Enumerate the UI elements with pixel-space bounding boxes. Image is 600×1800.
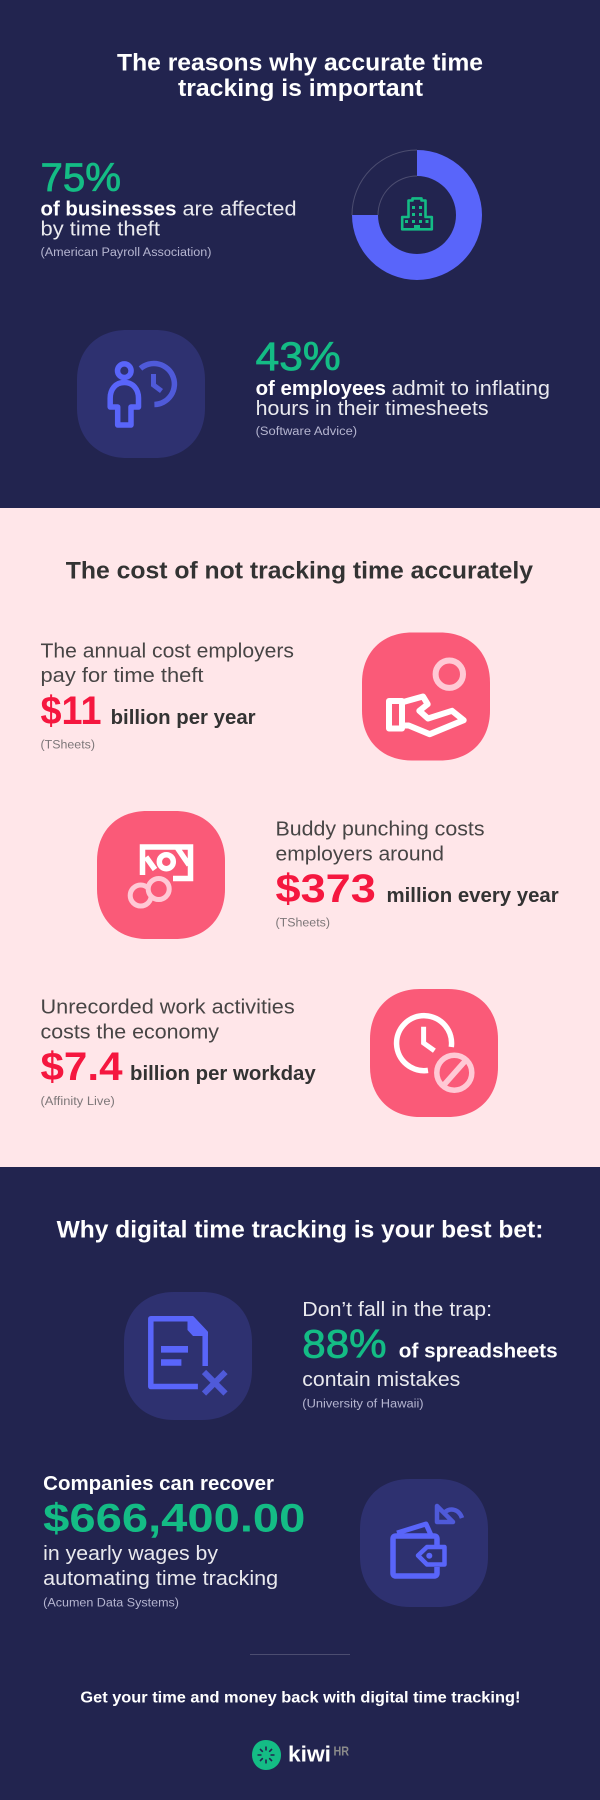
logo: kiwiHR: kiwi	[288, 1742, 331, 1766]
donut chart: 75 percent	[352, 150, 482, 280]
heading: The cost of not tracking time accurately	[66, 557, 534, 584]
stat: $7.4 billion per workday: (Affinity Live)	[40, 1096, 115, 1108]
stat: 75% of businesses: by time theft	[40, 219, 160, 241]
stat: 43% of employees: admit to inflating	[392, 378, 550, 400]
icon tile: hand and coin	[362, 632, 490, 760]
stat: 43% of employees: hours in their timesheets	[256, 398, 489, 420]
logo: kiwiHR	[252, 1740, 350, 1770]
stat: 75% of businesses: (American Payroll Association)	[40, 247, 212, 259]
stat: $7.4 billion per workday: billion per workday	[130, 1063, 317, 1085]
logo: kiwiHR: HR	[334, 1744, 350, 1758]
stat: companies can recover $666,400.00	[43, 1473, 305, 1610]
stat: $11 billion per year	[40, 640, 294, 752]
icon tile: employee and clock	[77, 330, 205, 458]
stat: $11 billion per year: billion per year	[111, 707, 256, 729]
stat: 75% of businesses: are affected	[182, 199, 296, 221]
stat: 75% of businesses: of businesses	[40, 199, 176, 221]
panel: the cost of not tracking time	[0, 508, 600, 1167]
stat: 43% of employees: (Software Advice)	[256, 426, 357, 438]
stat: $7.4 billion per workday: $7.4	[40, 1045, 123, 1089]
stat: $11 billion per year: $11	[40, 689, 102, 733]
icon tile: banknote and coins	[97, 811, 225, 939]
stat: $11 billion per year: (TSheets)	[40, 740, 95, 752]
icon tile: wallet with return arrow	[360, 1479, 488, 1607]
icon: office building	[402, 198, 432, 230]
title: The reasons why accurate time	[117, 50, 483, 77]
icon tile: document with error	[124, 1292, 252, 1420]
heading: Why digital time tracking is your best bet:	[57, 1216, 543, 1243]
title: tracking is important	[178, 75, 423, 102]
stat: 88% of spreadsheets: (University of Hawaii)	[302, 1399, 424, 1411]
stat: $373 million every year: $373	[276, 867, 376, 911]
stat: 88% of spreadsheets: Don’t fall in the trap:	[302, 1299, 492, 1321]
call to action: Get your time and money back with digital time tracking!	[80, 1690, 520, 1707]
stat: 75% of businesses	[40, 156, 296, 259]
stat: 43% of employees: 43%	[256, 335, 341, 379]
stat: 88% of spreadsheets: of spreadsheets	[399, 1341, 558, 1363]
stat: 88% of spreadsheets: contain mistakes	[302, 1369, 460, 1391]
panel: reasons why accurate tracking matters	[0, 0, 600, 508]
stat: $11 billion per year: pay for time theft	[40, 665, 204, 687]
stat: 88% of spreadsheets: 88%	[302, 1323, 386, 1367]
stat: 43% of employees: of employees	[256, 378, 386, 400]
stat: 88% of spreadsheets	[302, 1299, 558, 1411]
title	[117, 50, 483, 102]
stat: $373 million every year: (TSheets)	[276, 918, 330, 930]
stat: $7.4 billion per workday: costs the economy	[40, 1021, 219, 1043]
stat: 75% of businesses: 75%	[40, 156, 121, 200]
stat: $373 million every year: Buddy punching costs	[276, 819, 484, 841]
stat: $11 billion per year: The annual cost employers	[40, 640, 294, 662]
stat: $7.4 billion per workday	[40, 996, 317, 1108]
stat: companies can recover $666,400.00: (Acumen Data Systems)	[43, 1598, 179, 1610]
stat: 43% of employees	[256, 335, 550, 438]
stat: $373 million every year	[276, 819, 559, 930]
icon: kiwi slice	[252, 1740, 281, 1770]
stat: $373 million every year: million every year	[386, 885, 559, 907]
stat: $7.4 billion per workday: Unrecorded work activities	[40, 996, 295, 1018]
panel: why digital time tracking	[0, 1167, 600, 1800]
icon tile: clock with forbidden sign	[370, 989, 498, 1117]
stat: companies can recover $666,400.00: in yearly wages by	[43, 1543, 218, 1565]
stat: companies can recover $666,400.00: automating time tracking	[43, 1568, 278, 1590]
stat: companies can recover $666,400.00: Companies can recover	[43, 1473, 274, 1495]
stat: companies can recover $666,400.00: $666,400.00	[43, 1497, 305, 1541]
stat: $373 million every year: employers around	[276, 843, 444, 865]
